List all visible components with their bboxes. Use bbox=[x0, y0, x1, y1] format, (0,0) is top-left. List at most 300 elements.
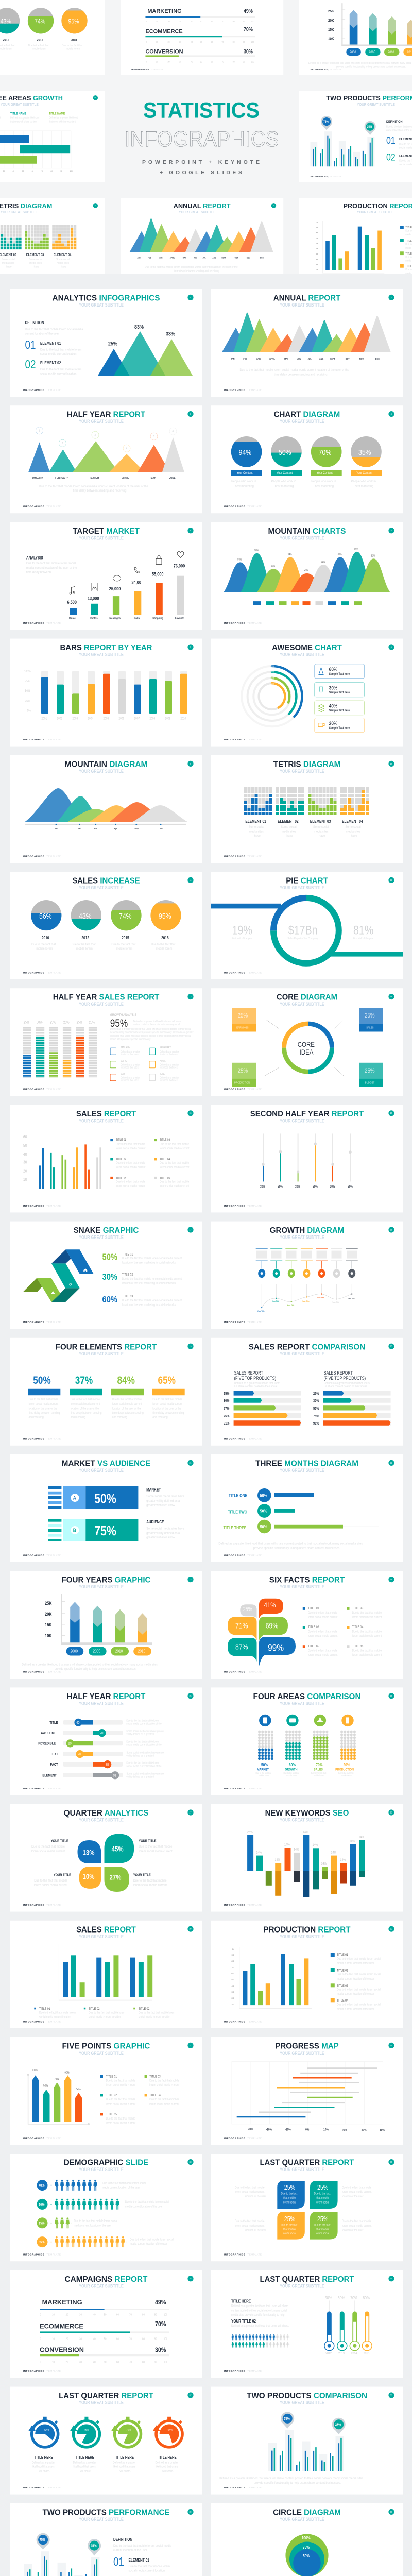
dial captions: Defined as a greater bbox=[156, 2461, 178, 2465]
element captions: Some social bbox=[345, 825, 361, 829]
month labels bbox=[32, 477, 176, 480]
thermometers: 50% bbox=[325, 2296, 332, 2300]
curve points bbox=[258, 1293, 355, 1312]
row notes: Due to the fact that mobile lorem social bbox=[130, 2238, 174, 2242]
legend: media current location of the user bbox=[337, 2008, 374, 2011]
definition text: DEFINITION bbox=[113, 2537, 132, 2542]
footer: INFOGRAPHICS bbox=[23, 2370, 44, 2372]
comparison right: 91% bbox=[313, 1421, 319, 1426]
page badge: 24 bbox=[390, 1578, 392, 1581]
area captions: 60% bbox=[289, 1762, 296, 1767]
definition text: social media current location bbox=[129, 2569, 165, 2573]
title: FOUR ELEMENTS REPORT bbox=[56, 1343, 157, 1351]
footer bbox=[224, 622, 262, 624]
page badge: 36 bbox=[390, 2277, 392, 2280]
footer: | TEMPLATE bbox=[45, 2370, 61, 2372]
slider labels: AWESOME bbox=[41, 1732, 57, 1735]
footer: | TEMPLATE bbox=[246, 1554, 262, 1557]
dial captions: will share. bbox=[38, 2470, 50, 2473]
dial teal: 85% bbox=[84, 2429, 89, 2432]
panel: tetris diagram bbox=[211, 755, 403, 863]
pin bar chart: 35% bbox=[335, 2423, 341, 2427]
area captions: MARKET bbox=[257, 1768, 269, 1772]
title: SIX FACTS REPORT bbox=[269, 1576, 345, 1585]
curve points: Your Title bbox=[348, 1297, 355, 1300]
market block bbox=[48, 1486, 138, 1509]
percent blocks bbox=[28, 1375, 185, 1395]
panel: six facts report bbox=[211, 1571, 403, 1679]
page badge: 19 bbox=[190, 1345, 192, 1348]
footer bbox=[224, 972, 262, 974]
footer: INFOGRAPHICS bbox=[224, 1437, 245, 1440]
petal captions: YOUR TITLE bbox=[139, 1839, 157, 1843]
title bbox=[74, 1226, 139, 1240]
axis labels: 500 bbox=[232, 1979, 234, 1981]
petal captions: lorem social media current bbox=[139, 1849, 173, 1853]
element captions: media sites bbox=[282, 829, 296, 834]
page badge: 15 bbox=[190, 1112, 192, 1114]
growth analysis: Defined as a greater likelihood that users will share content posted to their social bbox=[110, 1028, 191, 1031]
comparison right: Defined as a greater likelihood that users bbox=[324, 1382, 370, 1385]
ring chart bbox=[211, 898, 403, 963]
legend: TITLE 02 bbox=[308, 1626, 319, 1629]
footer bbox=[23, 855, 61, 857]
page badge: 1 bbox=[190, 296, 191, 299]
title: YOUR GREAT SUBTITLE bbox=[79, 1934, 124, 1939]
page badge bbox=[187, 761, 194, 767]
dial green: 70% bbox=[126, 2429, 131, 2432]
year captions bbox=[31, 935, 176, 951]
footer: INFOGRAPHICS bbox=[224, 1554, 245, 1557]
bar chart: 76,000 bbox=[174, 564, 185, 569]
axis labels: 200 bbox=[232, 1997, 234, 1999]
footer: | TEMPLATE bbox=[45, 1904, 61, 1906]
captions small: mobile lorem bbox=[341, 1774, 352, 1777]
page badge bbox=[388, 644, 394, 650]
footer bbox=[23, 1321, 61, 1324]
row notes: Due to the fact that mobile lorem social bbox=[74, 2219, 117, 2223]
block captions: greater websites know bbox=[146, 1503, 175, 1507]
slider fills: 91 bbox=[113, 1774, 116, 1777]
descriptions: time delay between sending bbox=[71, 1411, 101, 1415]
page badge: 13 bbox=[190, 995, 192, 998]
title: YOUR GREAT SUBTITLE bbox=[280, 1468, 324, 1473]
marketing row: 49% bbox=[155, 2298, 166, 2306]
growth analysis: likelihood that users will share content posted to their social network many social bbox=[110, 1035, 191, 1038]
legend: TITLE 01 bbox=[308, 1607, 319, 1611]
footer: INFOGRAPHICS bbox=[224, 1671, 245, 1673]
descriptions: location of the user or the bbox=[152, 1407, 181, 1411]
footer: | TEMPLATE bbox=[45, 2486, 61, 2489]
title: YOUR GREAT SUBTITLE bbox=[79, 536, 124, 541]
audience block: 75% bbox=[94, 1523, 116, 1539]
month labels: JUL bbox=[308, 358, 312, 360]
footer bbox=[23, 1088, 61, 1091]
page badge bbox=[187, 528, 194, 533]
footer: | TEMPLATE bbox=[45, 2137, 61, 2139]
ecommerce row: ECOMMERCE bbox=[40, 2322, 83, 2330]
slider labels: ELEMENT bbox=[42, 1774, 57, 1777]
footer bbox=[224, 2370, 262, 2372]
descriptions: and receiving bbox=[71, 1416, 85, 1419]
descriptions: Due to the fact that mobile bbox=[29, 1398, 58, 1401]
page badge bbox=[187, 994, 194, 999]
marker numbers: 2 bbox=[62, 442, 63, 445]
percent circles: 60% bbox=[39, 2203, 45, 2207]
title: YOUR GREAT SUBTITLE bbox=[79, 1818, 124, 1823]
legend: Due to the fact that mobile bbox=[352, 1612, 382, 1615]
axis labels: -30% bbox=[247, 2128, 253, 2131]
page badge bbox=[388, 1693, 394, 1699]
footer: INFOGRAPHICS bbox=[224, 2253, 245, 2256]
petal captions: lorem social media current bbox=[31, 1849, 65, 1853]
legend: TITLE 04 bbox=[160, 1158, 170, 1161]
definition text: 01 bbox=[25, 338, 36, 351]
legend: TITLE 04 bbox=[149, 2094, 161, 2097]
title: YOUR GREAT SUBTITLE bbox=[79, 2284, 124, 2289]
top rules bbox=[256, 1249, 358, 1269]
card text: 25% bbox=[365, 1012, 375, 1019]
scale ticks: 60 bbox=[116, 2313, 119, 2317]
title: SALES REPORT COMPARISON bbox=[249, 1343, 365, 1351]
preview slide: three areas growth bbox=[0, 91, 105, 182]
title: DEMOGRAPHIC SLIDE bbox=[64, 2159, 148, 2167]
footer: INFOGRAPHICS bbox=[23, 1321, 44, 1324]
scale ticks: 100 bbox=[164, 2313, 168, 2317]
panel: circle diagram bbox=[211, 2503, 403, 2576]
footer bbox=[23, 2137, 61, 2139]
footer: | TEMPLATE bbox=[45, 388, 61, 392]
axis labels: 20K bbox=[45, 1612, 52, 1617]
dial red bbox=[153, 2417, 182, 2447]
percent list: TITLE 01 bbox=[122, 1253, 133, 1256]
axis labels: 2003 bbox=[72, 717, 78, 721]
card text: BUDGET bbox=[365, 1081, 374, 1085]
footer bbox=[224, 2486, 262, 2489]
block captions: greater websites know bbox=[146, 1536, 175, 1539]
legend: lorem social media current bbox=[352, 1635, 382, 1638]
dial red: 65% bbox=[168, 2429, 173, 2432]
footer bbox=[23, 1787, 61, 1790]
card text: PRODUCTION bbox=[234, 1081, 250, 1085]
bar chart bbox=[59, 1944, 152, 2000]
title bbox=[65, 760, 147, 774]
footer bbox=[23, 1671, 61, 1673]
year captions: Due to the fact that bbox=[72, 942, 96, 946]
title: YOUR GREAT SUBTITLE bbox=[280, 1002, 324, 1007]
ring values: First Half of the year bbox=[353, 937, 374, 940]
panel: annual report bbox=[211, 289, 403, 397]
title: YOUR GREAT SUBTITLE bbox=[79, 419, 124, 424]
block captions bbox=[146, 1487, 184, 1539]
box text bbox=[329, 667, 350, 730]
page badge: 38 bbox=[390, 2394, 392, 2396]
panel: sales report grouped bbox=[10, 1921, 202, 2028]
definition text bbox=[113, 2537, 171, 2576]
legend: Due to the fact that mobile bbox=[352, 1649, 382, 1653]
footer bbox=[23, 1554, 61, 1557]
slider labels bbox=[38, 1721, 58, 1777]
page badge bbox=[388, 2509, 394, 2515]
dot matrix: market bbox=[258, 1730, 274, 1760]
marker numbers: 6 bbox=[172, 430, 174, 433]
mountain chart bbox=[222, 313, 391, 352]
stripe labels bbox=[24, 1021, 95, 1025]
gantt chart bbox=[232, 2062, 383, 2124]
panel: last quarter report leaves bbox=[211, 2154, 403, 2261]
captions: People who work in bbox=[351, 480, 376, 483]
title: YOUR GREAT SUBTITLE bbox=[280, 2284, 324, 2289]
month labels bbox=[231, 358, 380, 360]
year pills: 2015 bbox=[138, 1649, 145, 1654]
footer: INFOGRAPHICS bbox=[224, 1205, 245, 1207]
year captions: mobile lorem bbox=[156, 947, 172, 951]
month labels: SEPT bbox=[330, 358, 335, 360]
year pills: 2000 bbox=[71, 1649, 78, 1654]
legend: TITLE 02 bbox=[139, 2007, 149, 2011]
description: time delay between sending and receiving bbox=[73, 489, 127, 493]
descriptions bbox=[29, 1398, 184, 1419]
stacked stripe chart bbox=[23, 1027, 100, 1077]
hero title block bbox=[125, 98, 279, 176]
title: SALES REPORT bbox=[76, 1110, 136, 1118]
progress rows: TITLE THREE bbox=[224, 1525, 246, 1530]
footer: | TEMPLATE bbox=[246, 1787, 262, 1790]
leaf cards: Due to the fact bbox=[281, 2192, 298, 2196]
descriptions: lorem social media current bbox=[29, 1402, 59, 1406]
block captions: greater virility defined as a bbox=[146, 1499, 180, 1503]
month text: FEBRUARY bbox=[160, 1046, 171, 1049]
card text bbox=[234, 1012, 375, 1085]
growth analysis: network many social media sites provide specific functionality. Defined as a greater bbox=[110, 1031, 194, 1035]
growth analysis: media sites provide specific functionality. bbox=[110, 1038, 151, 1041]
side notes: location of the user bbox=[342, 2195, 364, 2198]
corner cards bbox=[232, 1008, 383, 1087]
bar chart: 34,00 bbox=[132, 580, 141, 585]
title bbox=[64, 1809, 148, 1823]
content buttons: Your Content bbox=[277, 472, 293, 475]
legend: Due to the fact that mobile bbox=[116, 1180, 145, 1184]
title: YOUR GREAT SUBTITLE bbox=[79, 1235, 124, 1240]
percent list: 50% bbox=[102, 1252, 117, 1262]
page badge bbox=[187, 1577, 194, 1582]
month text: Defined as a greater bbox=[121, 1050, 140, 1053]
leaf cards: lorem social bbox=[283, 2201, 296, 2205]
value labels: 70% bbox=[54, 2078, 59, 2081]
footer: INFOGRAPHICS bbox=[224, 972, 245, 974]
scale ticks: 60 bbox=[116, 2337, 119, 2341]
axis labels: 2007 bbox=[134, 717, 140, 721]
ecommerce row: 70% bbox=[155, 2320, 166, 2328]
footer: | TEMPLATE bbox=[45, 2253, 61, 2256]
nested circles: 50% bbox=[303, 2553, 310, 2558]
legend: TITLE 02 bbox=[89, 2007, 100, 2011]
scale ticks: 20 bbox=[66, 2361, 68, 2364]
page badge bbox=[388, 1809, 394, 1816]
slider chart: 30% bbox=[260, 1185, 265, 1189]
footer bbox=[23, 388, 61, 392]
title: YOUR GREAT SUBTITLE bbox=[280, 1235, 324, 1240]
page badge: 12 bbox=[390, 878, 392, 882]
bar chart: 13,000 bbox=[88, 596, 99, 601]
axes bbox=[61, 1594, 152, 1645]
footer: | TEMPLATE bbox=[45, 1554, 61, 1557]
page badge bbox=[187, 2159, 194, 2165]
row notes: media current location of the user bbox=[130, 2243, 167, 2246]
scale ticks: 50 bbox=[104, 2313, 107, 2317]
bar chart bbox=[239, 1947, 312, 2008]
descriptions: time delay between sending bbox=[112, 1411, 144, 1415]
scale ticks: 80 bbox=[142, 2337, 145, 2341]
year pills bbox=[66, 1647, 151, 1656]
value labels: 14% bbox=[331, 1851, 337, 1855]
title bbox=[62, 1459, 150, 1473]
page badge bbox=[187, 1460, 194, 1466]
footer bbox=[224, 388, 262, 392]
dial blue bbox=[28, 2417, 58, 2447]
page badge: 26 bbox=[390, 1694, 392, 1697]
legend: lorem social media current bbox=[352, 1654, 382, 1657]
definition text: ELEMENT 01 bbox=[129, 2557, 149, 2563]
descriptions: and receiving bbox=[29, 1416, 44, 1419]
panel: second half year report bbox=[211, 1105, 403, 1212]
people rows bbox=[55, 2180, 127, 2247]
dial green bbox=[111, 2417, 141, 2447]
title: YOUR GREAT SUBTITLE bbox=[280, 1351, 324, 1357]
speech bubbles: 25% bbox=[243, 1606, 252, 1613]
slider chart: 50% bbox=[348, 1185, 353, 1189]
title bbox=[53, 993, 160, 1007]
axis labels bbox=[247, 2128, 385, 2132]
timeline: Feb bbox=[78, 827, 81, 830]
footer: INFOGRAPHICS bbox=[23, 1205, 44, 1207]
title: LAST QUARTER REPORT bbox=[260, 2275, 354, 2284]
progress rows: 50% bbox=[260, 1524, 267, 1529]
arrow bars bbox=[70, 1602, 147, 1642]
conversion row: 30% bbox=[155, 2346, 166, 2354]
comparison left: 57% bbox=[224, 1406, 230, 1411]
footer: INFOGRAPHICS bbox=[23, 1437, 44, 1440]
text block: Defined as a greater likelihood that users will share. bbox=[231, 2325, 289, 2328]
timeline: Mar bbox=[94, 827, 97, 830]
title bbox=[273, 760, 340, 774]
legend: Due to the fact that mobile bbox=[308, 1630, 337, 1634]
tiny descriptions bbox=[256, 1251, 357, 1259]
area icons bbox=[259, 1715, 354, 1726]
value labels: 34% bbox=[76, 2088, 81, 2091]
title: YOUR GREAT SUBTITLE bbox=[79, 1468, 124, 1473]
page badge: 2 bbox=[391, 296, 392, 299]
percent blocks: 50% bbox=[33, 1375, 51, 1387]
gauge circles: 50% bbox=[279, 448, 291, 456]
footer: | TEMPLATE bbox=[246, 2020, 262, 2023]
percent labels bbox=[237, 548, 375, 572]
side notes: lorem social media current bbox=[342, 2191, 372, 2194]
footer bbox=[224, 1671, 262, 1673]
marker numbers: 4 bbox=[126, 447, 127, 450]
side notes: location of the user bbox=[245, 2195, 266, 2198]
scale ticks: 100 bbox=[164, 2337, 168, 2341]
captions small: mobile lorem bbox=[259, 1774, 270, 1777]
growth analysis: Defined as a greater likelihood that users will share bbox=[133, 1020, 181, 1023]
definition text bbox=[25, 320, 83, 376]
percent list: location of the user marketing in social networks bbox=[122, 1303, 176, 1307]
panel: new keywords seo bbox=[211, 1804, 403, 1912]
ring labels: 20% bbox=[271, 677, 274, 679]
dot matrix: sales bbox=[313, 1730, 329, 1760]
value labels: 14% bbox=[312, 1844, 318, 1847]
petal captions: Due to the fact that mobile bbox=[31, 1845, 65, 1849]
petal captions bbox=[31, 1839, 173, 1887]
footer bbox=[23, 972, 61, 974]
scale ticks: 30 bbox=[79, 2361, 82, 2364]
captions: best marketing bbox=[355, 484, 374, 488]
page badge bbox=[388, 994, 394, 999]
legend: TITLE 03 bbox=[160, 1139, 170, 1142]
area captions bbox=[257, 1762, 354, 1772]
page badge bbox=[388, 1460, 394, 1466]
scale ticks: 50 bbox=[104, 2337, 107, 2341]
axis labels: 2001 bbox=[41, 717, 47, 721]
petal captions: YOUR TITLE bbox=[51, 1839, 68, 1843]
title: YOUR GREAT SUBTITLE bbox=[280, 769, 324, 774]
element captions: ELEMENT 01 bbox=[245, 819, 266, 824]
market block: A bbox=[73, 1495, 76, 1501]
legend: social media current location bbox=[89, 2015, 121, 2019]
core label bbox=[298, 1040, 315, 1056]
year captions: 2018 bbox=[161, 935, 169, 940]
footer: | TEMPLATE bbox=[246, 1437, 262, 1440]
axis labels bbox=[24, 670, 186, 721]
percent list: location of the user marketing in social networks bbox=[122, 1282, 176, 1285]
description: Due to the fact that mobile lorem social media words current location of the user or the bbox=[39, 484, 148, 488]
title: YOUR GREAT SUBTITLE bbox=[79, 2050, 124, 2056]
footer: INFOGRAPHICS bbox=[224, 2020, 245, 2023]
description: Defined as a greater likelihood that users will share content posted to their social network many social media sites bbox=[218, 1541, 363, 1546]
title bbox=[253, 1692, 360, 1706]
legend bbox=[331, 1953, 381, 2011]
axis labels: 2010 bbox=[180, 717, 186, 721]
month labels: NOV bbox=[359, 358, 364, 360]
dial captions: likelihood that users bbox=[113, 2465, 135, 2469]
descriptions: time delay between sending bbox=[29, 1411, 60, 1415]
card text: EARNINGS bbox=[236, 1026, 249, 1030]
definition text: social media current location bbox=[40, 372, 77, 376]
legend: TITLE 03 bbox=[337, 1984, 349, 1988]
title: YOUR GREAT SUBTITLE bbox=[280, 2517, 324, 2522]
definition text: ELEMENT 02 bbox=[40, 360, 61, 365]
footer: | TEMPLATE bbox=[45, 738, 61, 741]
leaf cards: Due to the fact bbox=[314, 2224, 331, 2227]
slider labels: INCREDIBLE bbox=[38, 1742, 56, 1746]
bar chart bbox=[41, 671, 187, 714]
page badge bbox=[187, 1110, 194, 1116]
title: PIE CHART bbox=[286, 877, 328, 885]
footer bbox=[23, 1904, 61, 1906]
dot matrix: production bbox=[340, 1730, 356, 1760]
panel: two products performance bbox=[10, 2503, 202, 2576]
preview slide: production report bbox=[299, 198, 412, 290]
axis labels: 0% bbox=[27, 709, 31, 713]
month labels: MAR bbox=[256, 358, 261, 360]
footer: | TEMPLATE bbox=[246, 2137, 262, 2139]
page badge bbox=[187, 1693, 194, 1699]
footer: | TEMPLATE bbox=[246, 2486, 262, 2489]
stripe labels: 50% bbox=[37, 1021, 43, 1025]
content buttons: Your Content bbox=[237, 472, 253, 475]
stripe labels: 25% bbox=[63, 1021, 70, 1025]
row notes: Due to the fact that mobile lorem social bbox=[102, 2182, 146, 2185]
